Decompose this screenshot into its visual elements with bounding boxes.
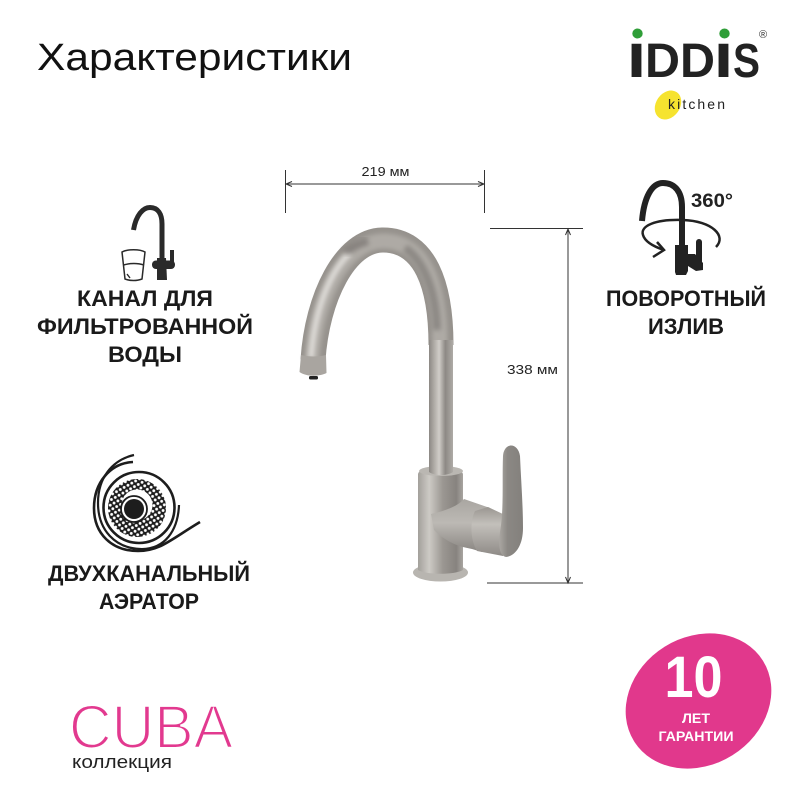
warranty text: ЛЕТ (682, 711, 711, 726)
logo wordmark: I (714, 35, 733, 88)
logo wordmark: S (733, 35, 760, 88)
label: filtered water channel: ФИЛЬТРОВАННОЙ (37, 314, 253, 339)
label: dual channel aerator (48, 561, 250, 614)
label: filtered water channel (37, 286, 253, 367)
icon: aerator (94, 455, 200, 551)
logo yellow spot (649, 85, 687, 125)
faucet tip (300, 355, 326, 376)
360 degree label: 360° (691, 191, 733, 212)
logo wordmark: D (645, 35, 680, 88)
logo wordmark: D (680, 35, 715, 88)
logo wordmark (627, 35, 760, 88)
icon: rotating spout 360 (642, 183, 733, 275)
faucet handle neck (431, 499, 490, 552)
product: faucet (300, 240, 523, 582)
warranty badge (600, 606, 797, 796)
height label: 338 мм (507, 362, 558, 377)
faucet lever (499, 446, 523, 557)
label: swivel spout: ИЗЛИВ (648, 314, 724, 339)
height dimension 338 mm (487, 228, 583, 583)
label: swivel spout (606, 286, 766, 339)
faucet spout (311, 240, 441, 360)
label: filtered water channel: КАНАЛ ДЛЯ (77, 286, 213, 311)
faucet handle collar (471, 507, 505, 556)
logo wordmark: I (627, 35, 646, 88)
collection caption: коллекция (72, 752, 172, 772)
width dimension 219 mm (286, 164, 484, 213)
label: dual channel aerator: ДВУХКАНАЛЬНЫЙ (48, 561, 250, 586)
logo green dots (632, 28, 730, 38)
warranty badge: ГАРАНТИИ (658, 729, 734, 744)
faucet body (418, 466, 463, 574)
label: dual channel aerator: АЭРАТОР (99, 589, 199, 614)
logo kitchen: kitchen (668, 96, 725, 112)
icon: filter faucet with glass (122, 208, 175, 280)
collection name: CUBA (69, 693, 233, 761)
label: swivel spout: ПОВОРОТНЫЙ (606, 286, 766, 311)
label: filtered water channel: ВОДЫ (108, 342, 182, 367)
warranty years: 10 (664, 645, 722, 710)
faucet straight riser (429, 340, 453, 472)
width label: 219 мм (362, 164, 410, 179)
title: Характеристики (37, 37, 352, 79)
faucet base (413, 564, 468, 582)
logo registered mark: ® (759, 29, 767, 41)
logo: IDDIS kitchen (627, 28, 767, 125)
